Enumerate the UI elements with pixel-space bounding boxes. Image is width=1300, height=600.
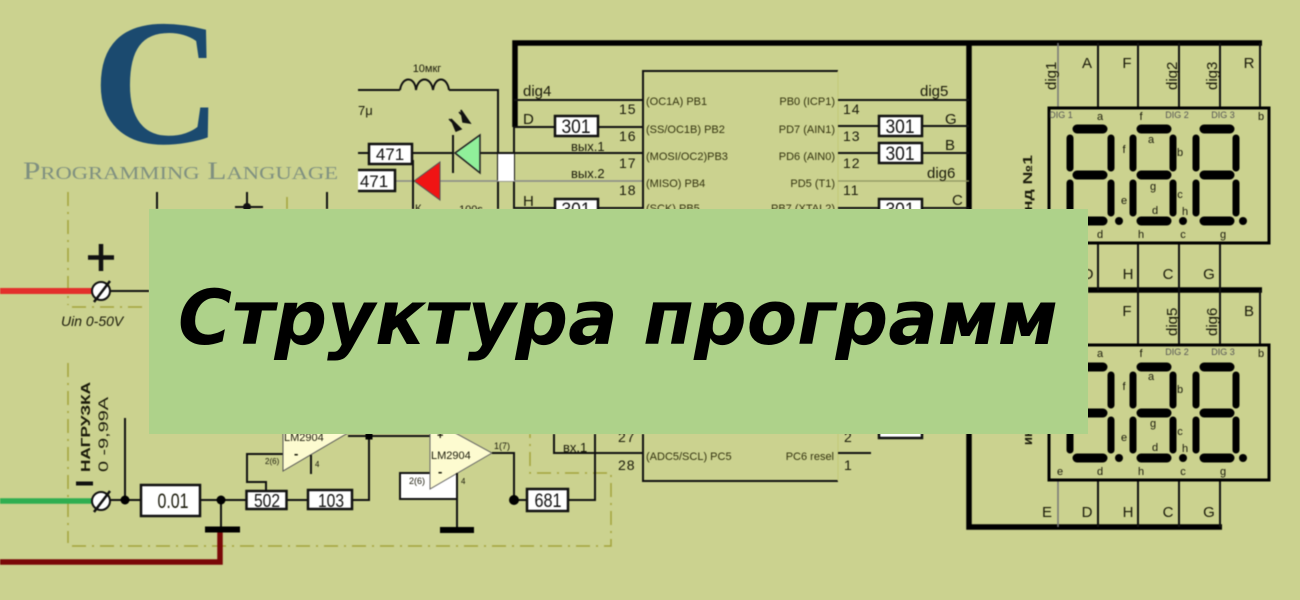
resistor 301 boxes: 301: [886, 144, 914, 165]
inductor: 10мкг: [413, 63, 441, 75]
load label: НАГРУЗКА: [78, 381, 93, 472]
display 2 middle labels: dig5: [1164, 308, 1181, 336]
op-amp 1: LM2904: [284, 432, 324, 444]
right signal labels: [920, 83, 963, 209]
left pin numbers: 16: [619, 128, 637, 144]
indicator 1 vertical label: инд №1: [1020, 155, 1035, 222]
input continuation: [110, 290, 149, 292]
seven-segment display 2: e: [1121, 432, 1127, 444]
input label: вх.1: [563, 440, 587, 455]
display 2 footer labels: E: [1042, 504, 1052, 521]
left pin numbers: 28: [618, 457, 636, 473]
left IC pin names: (SS/OC1B) PB2: [646, 124, 725, 136]
seven-segment display 1: DIG 3: [1211, 110, 1235, 120]
seven-segment display 2: d: [1152, 442, 1158, 454]
seven-segment display 2: DIG 2: [1165, 347, 1189, 357]
right IC pin names: [771, 96, 835, 463]
left IC pin names: (ADC5/SCL) PC5: [646, 451, 732, 463]
icon: green LED: [449, 110, 480, 173]
left pin numbers: 15: [619, 101, 637, 117]
display 1 header labels: [1043, 55, 1255, 90]
right pin numbers: 2: [844, 429, 853, 445]
shunt resistor 0.01: 0.01: [158, 490, 188, 513]
right IC pin names: PD5 (T1): [790, 178, 835, 190]
seven-segment display 1: c: [1180, 229, 1186, 241]
seven-segment display 1: b: [1258, 111, 1264, 123]
display 1 header labels: dig1: [1043, 62, 1060, 90]
positive input wire: [0, 288, 93, 294]
top-left power and LED wiring: [157, 90, 643, 211]
resistor 471: 471: [376, 145, 404, 164]
display 1 header labels: A: [1082, 55, 1092, 72]
display 1 header labels: dig2: [1164, 62, 1181, 90]
thick digit bus: [515, 43, 1262, 527]
op-amp 2: 2(6): [409, 476, 425, 486]
display 2 middle labels: B: [1244, 303, 1254, 320]
display 2 middle labels: [1122, 303, 1254, 336]
seven-segment display 1: g: [1220, 229, 1226, 241]
right signal labels: dig6: [927, 165, 955, 182]
left signal labels: dig4: [523, 83, 551, 100]
seven-segment display 1: c: [1177, 189, 1183, 201]
display 1 header labels: F: [1122, 55, 1132, 72]
resistor 681: 681: [534, 491, 562, 512]
op-amp 2: -: [438, 464, 442, 479]
left signal labels: [523, 83, 605, 210]
display 2 middle labels: dig6: [1204, 308, 1221, 336]
green load wire: [0, 498, 93, 504]
shunt resistor 0.01: [141, 485, 200, 516]
left IC pin names: (OC1A) PB1: [646, 96, 707, 108]
left signal labels: вых.2: [571, 166, 605, 181]
icon: input terminal: [92, 281, 110, 302]
display 2 middle labels: F: [1122, 303, 1132, 320]
display 1 footer labels: C: [1163, 266, 1174, 283]
seven-segment display 1: DIG 1: [1049, 110, 1073, 120]
load label: 0 -9,99A: [95, 396, 111, 472]
display 2 footer labels: H: [1123, 504, 1133, 521]
microcontroller outline: [643, 71, 838, 481]
seven-segment display 1: d: [1097, 229, 1103, 241]
right signal labels: B: [945, 137, 955, 154]
display 1 footer labels: D: [1083, 266, 1094, 283]
op-amp 2: 4: [461, 477, 466, 486]
seven-segment display 2: b: [1258, 348, 1264, 360]
display 1 footer labels: H: [1123, 266, 1133, 283]
seven-segment display 2: d: [1097, 466, 1103, 478]
seven-segment display 2: h: [1138, 466, 1144, 478]
seven-segment display 1: a: [1097, 111, 1104, 123]
capacitor label: 7μ: [358, 103, 373, 118]
resistor 502: 502: [254, 491, 280, 511]
seven-segment display 1: f: [1122, 144, 1126, 156]
left signal labels: H: [523, 193, 534, 210]
seven-segment display 2: g: [1220, 466, 1226, 478]
display 2 footer labels: G: [1203, 504, 1215, 521]
op-amp 1: 2(6): [265, 457, 280, 466]
op-amp 2: +: [437, 430, 443, 442]
resistor 471: [369, 144, 412, 164]
left signal labels: вых.1: [571, 139, 605, 154]
plus sign: [88, 244, 114, 271]
left IC pin names: (MISO) PB4: [646, 178, 705, 190]
resistor 301 boxes: 301: [886, 117, 914, 138]
right signal labels: G: [945, 111, 957, 128]
seven-segment display 1: h: [1138, 229, 1144, 241]
left pin numbers: 18: [619, 182, 637, 198]
seven-segment display 2: h: [1182, 443, 1188, 455]
seven-segment display 2: g: [1150, 418, 1156, 430]
right IC pin names: PB0 (ICP1): [779, 96, 835, 108]
seven-segment display 1: f: [1139, 111, 1143, 123]
icon: red LED: [413, 160, 440, 215]
display 1 footer labels: [1083, 266, 1215, 283]
logo subtitle: Programming Language: [23, 158, 338, 185]
left signal labels: D: [523, 111, 534, 128]
resistor 301 boxes: 301: [562, 200, 590, 221]
op-amp 2 output wiring: [440, 434, 871, 530]
left IC pin names: [646, 96, 732, 463]
inductor: [400, 63, 449, 90]
display wiring: [1058, 43, 1260, 527]
dashed enclosure outlines: [68, 192, 611, 546]
title panel: [149, 209, 1088, 434]
seven-segment display 1: b: [1177, 147, 1183, 159]
seven-segment display 2: f: [1139, 348, 1143, 360]
seven-segment display 2: c: [1177, 426, 1183, 438]
left pin numbers: 27: [618, 429, 636, 445]
seven-segment display 1: d: [1152, 205, 1158, 217]
display 1 header labels: R: [1244, 55, 1255, 72]
resistor 471 lower: 471: [360, 172, 388, 191]
op-amp 1: -: [294, 446, 298, 461]
left pin numbers: 17: [619, 155, 637, 171]
seven-segment display 2: DIG 3: [1211, 347, 1235, 357]
icon: load terminal: [92, 491, 110, 512]
seven-segment display 2: [1049, 345, 1269, 480]
capacitor value: 100s: [459, 204, 483, 216]
seven-segment display 2: b: [1177, 384, 1183, 396]
white signal gap: [498, 154, 514, 181]
seven-segment display 1: g: [1150, 181, 1156, 193]
left IC pin names: (SCK) PB5: [646, 203, 700, 215]
load label: [76, 381, 111, 484]
op-amp 2 feedback white block: [400, 473, 457, 499]
op-amp 1: 4: [315, 460, 320, 469]
left pin numbers: [618, 101, 637, 473]
current sense wiring: [110, 418, 430, 530]
display 2 footer labels: C: [1163, 504, 1174, 521]
display 2 footer labels: D: [1082, 504, 1093, 521]
resistor 471 lower: [358, 170, 395, 191]
dark red return wire: [0, 532, 220, 562]
right pin numbers: [843, 101, 861, 473]
resistor 301 boxes: [555, 116, 922, 438]
resistor 301 boxes: 301: [886, 200, 914, 221]
left IC pin names: (MOSI/OC2)PB3: [646, 151, 728, 163]
right IC pin names: PD7 (AIN1): [779, 124, 835, 136]
right pin numbers: 1: [844, 457, 853, 473]
right IC pin names: PB7 (XTAL2): [771, 203, 835, 215]
right pin numbers: 14: [843, 101, 861, 117]
seven-segment display 2: a: [1148, 371, 1155, 383]
resistor 301 boxes: 301: [562, 117, 590, 138]
seven-segment display 2: e: [1057, 466, 1063, 478]
right IC pin names: PC6 resel: [786, 451, 834, 463]
display 1 header labels: dig3: [1204, 62, 1221, 90]
seven-segment display 2: a: [1097, 348, 1104, 360]
icon: red LED: К: [415, 203, 422, 215]
right pin numbers: 11: [843, 182, 860, 198]
right signal labels: dig5: [920, 83, 948, 100]
logo: C Programming Language: [23, 0, 338, 185]
op-amp 2: [409, 418, 510, 489]
right IC pin names: PD6 (AIN0): [779, 151, 835, 163]
right pin wires: [838, 100, 969, 208]
display 1 footer labels: G: [1203, 266, 1215, 283]
seven-segment display 2: f: [1122, 381, 1126, 393]
op-amp 1: [265, 420, 370, 474]
seven-segment display 1: h: [1182, 206, 1188, 218]
op-amp 2: LM2904: [431, 450, 471, 462]
seven-segment display 1: a: [1148, 134, 1155, 146]
display 2 footer labels: [1042, 504, 1215, 521]
seven-segment display 1: e: [1121, 195, 1127, 207]
op-amp 2: 1(7): [494, 441, 510, 451]
resistor 103: [308, 490, 352, 511]
right pin numbers: 13: [843, 128, 861, 144]
seven-segment display 1: DIG 2: [1165, 110, 1189, 120]
seven-segment display 1: [1049, 108, 1269, 243]
title: Структура программ: [178, 273, 1058, 362]
left pin wires: [514, 100, 643, 208]
seven-segment display 2: c: [1180, 466, 1186, 478]
indicator 2 vertical label: инд №2: [1020, 396, 1035, 445]
right signal labels: C: [952, 192, 963, 209]
resistor 103: 103: [318, 491, 344, 511]
right pin numbers: 12: [843, 155, 861, 171]
input voltage label: Uin 0-50V: [61, 313, 125, 329]
